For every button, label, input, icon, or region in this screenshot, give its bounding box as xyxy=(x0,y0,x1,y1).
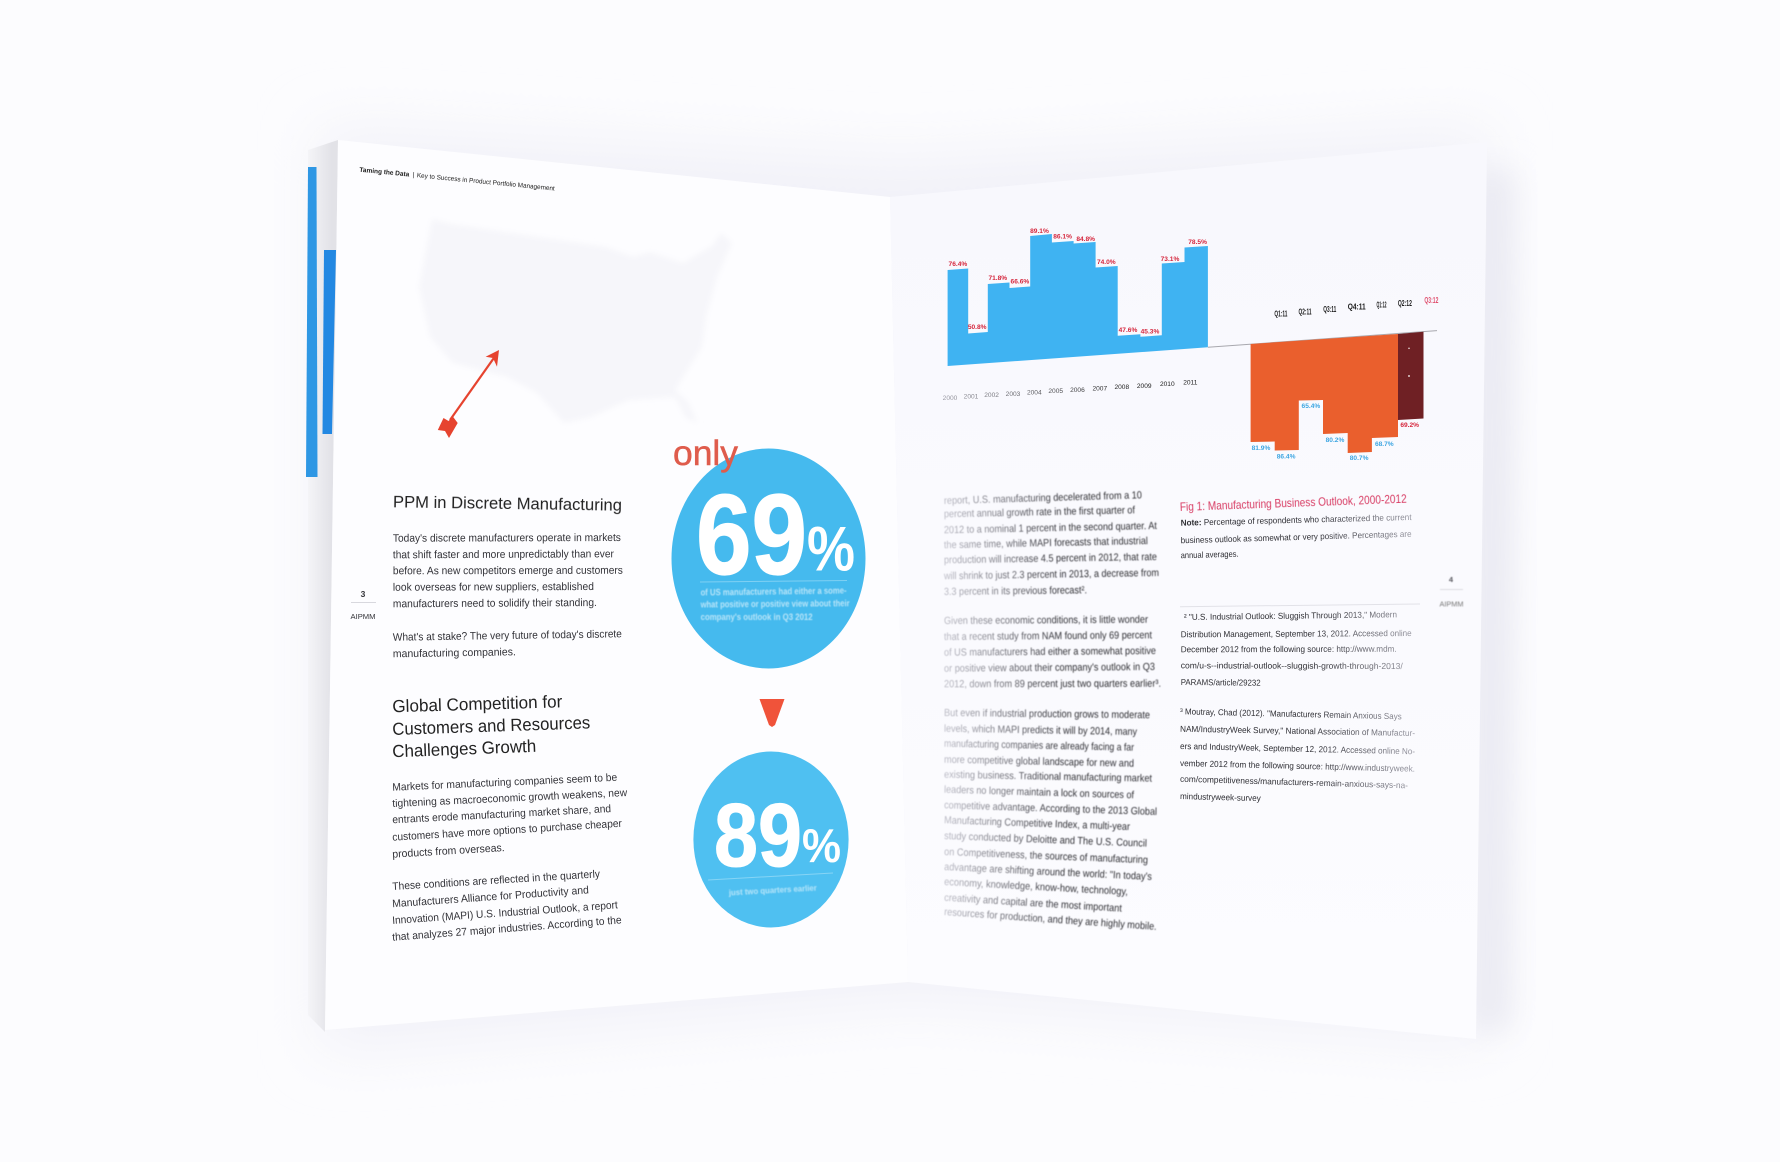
page number right: AIPMM xyxy=(1440,602,1464,608)
body text: intro xyxy=(393,532,623,660)
body text: intro: before. As new competitors emerge and customers xyxy=(393,565,623,577)
blue tab outer xyxy=(306,167,318,477)
quarter value labels: 86.4% xyxy=(1277,454,1296,460)
figure note xyxy=(1180,512,1412,560)
quarter labels: Q3:12 xyxy=(1424,296,1439,305)
page stack on the left edge xyxy=(306,140,338,1032)
body text: markets: Markets for manufacturing companies seem to be xyxy=(392,772,617,794)
running header: | xyxy=(412,172,415,179)
body text: right page column: 2012 to a nominal 1 percent in the second quarter. At xyxy=(944,521,1157,536)
figure title: Fig 1: Manufacturing Business Outlook, 2000-2012 xyxy=(1180,493,1407,514)
book shadow xyxy=(320,130,1490,1050)
quarter value labels: 69.2% xyxy=(1400,422,1419,429)
footnotes: Distribution Management, September 13, 2012. Accessed online xyxy=(1181,628,1412,639)
bar value labels: 84.8% xyxy=(1076,236,1095,243)
figure note: business outlook as somewhat or very positive. Percentages are xyxy=(1180,529,1412,545)
footnotes: ³ Moutray, Chad (2012). "Manufacturers Remain Anxious Says xyxy=(1180,706,1402,721)
word: only: only xyxy=(673,434,738,473)
footnotes: ers and IndustryWeek, September 12, 2012. Accessed online No- xyxy=(1180,741,1415,756)
bar value labels: 66.6% xyxy=(1011,278,1029,286)
map of the United States xyxy=(419,219,732,423)
body text: right page column: of US manufacturers had either a somewhat positive xyxy=(944,646,1156,659)
year axis labels: 2001 xyxy=(964,394,979,400)
body text: right page column: competitive advantage. According to the 2013 Global xyxy=(944,800,1157,818)
body text: markets: tightening as macroeconomic growth weakens, new xyxy=(392,787,628,810)
bar value labels: 71.8% xyxy=(988,275,1007,282)
body text: right page column: study conducted by Deloitte and The U.S. Council xyxy=(944,831,1147,850)
body text: right page column: manufacturing companies are already facing a far xyxy=(944,739,1135,754)
down triangle xyxy=(760,699,784,727)
panel: left page xyxy=(325,140,908,1030)
body text: markets: These conditions are reflected in the quarterly xyxy=(392,868,601,893)
body text: intro: manufacturing companies. xyxy=(393,646,516,660)
caption xyxy=(700,585,850,622)
body text: markets: Innovation (MAPI) U.S. Industrial Outlook, a report xyxy=(392,899,618,927)
year axis labels: 2004 xyxy=(1027,390,1042,396)
body text: right page column: But even if industrial production grows to moderate xyxy=(944,708,1150,721)
current quarter bar xyxy=(1398,332,1424,420)
year axis labels: 2003 xyxy=(1006,391,1021,398)
bar value labels: 73.1% xyxy=(1161,256,1179,263)
quarter labels: Q2:11 xyxy=(1298,308,1312,317)
caption: just two quarters earlier xyxy=(728,883,818,898)
quarter value labels xyxy=(1252,403,1419,462)
figure note: Note: Percentage of respondents who characterized the current xyxy=(1181,512,1412,528)
bar value labels: 74.0% xyxy=(1097,259,1116,266)
year axis labels: 2011 xyxy=(1183,380,1198,386)
running header xyxy=(359,167,555,193)
caption: of US manufacturers had either a some- xyxy=(700,585,847,597)
page number right: 4 xyxy=(1449,575,1454,584)
year axis labels: 2009 xyxy=(1137,383,1152,390)
quarter labels: Q3:11 xyxy=(1323,305,1337,314)
footnotes: mindustryweek-survey xyxy=(1180,791,1262,803)
bar value labels: 45.3% xyxy=(1141,328,1159,336)
body text: right page column: 2012, down from 89 percent just two quarters earlier³. xyxy=(944,679,1161,690)
heading: Global Competition: Customers and Resources xyxy=(392,712,591,739)
chart: annual outlook bars xyxy=(943,228,1208,402)
body text: right page column: leaders no longer maintain a lock on sources of xyxy=(944,785,1134,801)
bar value labels: 76.4% xyxy=(949,261,967,268)
bar value labels: 47.6% xyxy=(1119,327,1137,334)
body text: right page column: report, U.S. manufacturing decelerated from a 10 xyxy=(944,490,1142,507)
body text: markets: customers have more options to purchase cheaper xyxy=(392,818,623,844)
body text: right page column: levels, which MAPI predicts it will by 2014, many xyxy=(944,724,1138,738)
body text: intro: What's at stake? The very future of today's discrete xyxy=(393,628,622,644)
body text: right page column: or positive view about their company's outlook in Q3 xyxy=(944,662,1155,675)
quarter labels: Q4:11 xyxy=(1348,303,1366,312)
quarter labels: Q2:12 xyxy=(1398,299,1412,308)
body text: markets: products from overseas. xyxy=(392,842,505,861)
body text: right page column: economy, knowledge, know-how, technology, xyxy=(944,877,1128,898)
quarter labels: Q1:12 xyxy=(1376,301,1387,310)
bar value labels: 50.8% xyxy=(968,324,987,331)
body text: intro: look overseas for new suppliers, established xyxy=(393,581,594,594)
body text: right page column: Given these economic conditions, it is little wonder xyxy=(944,615,1148,627)
page number left xyxy=(350,589,376,621)
quarter value labels: 80.7% xyxy=(1350,455,1369,462)
body text: right page column: that a recent study from NAM found only 69 percent xyxy=(944,630,1152,643)
footnotes: ² "U.S. Industrial Outlook: Sluggish Through 2013," Modern xyxy=(1184,609,1397,622)
year axis labels xyxy=(943,380,1198,402)
bar value labels: 86.1% xyxy=(1053,234,1072,240)
figure 89: 89 xyxy=(714,786,802,886)
caption: company's outlook in Q3 2012 xyxy=(701,612,813,622)
body text: intro: manufacturers need to solidify their standing. xyxy=(393,597,597,610)
footnotes: com/competitiveness/manufacturers-remain-anxious-says-na- xyxy=(1180,774,1408,790)
year axis labels: 2010 xyxy=(1160,381,1175,388)
heading: Global Competition: Global Competition for xyxy=(392,691,563,716)
red arrow xyxy=(438,350,499,438)
bar value labels xyxy=(949,228,1207,336)
year axis labels: 2006 xyxy=(1070,387,1085,394)
footnotes: com/u-s--industrial-outlook--sluggish-growth-through-2013/ xyxy=(1181,660,1403,671)
quarter value labels: 68.7% xyxy=(1375,441,1394,448)
body text: right page column: the same time, while MAPI forecasts that industrial xyxy=(944,536,1148,551)
blue tab inner xyxy=(322,250,336,434)
bar value labels: 89.1% xyxy=(1030,228,1049,235)
body text: right page column: on Competitiveness, the sources of manufacturing xyxy=(944,847,1148,866)
panel: right page xyxy=(890,142,1487,1039)
quarter value labels: 81.9% xyxy=(1252,445,1270,452)
body text: right page column: percent annual growth rate in the first quarter of xyxy=(944,505,1135,520)
body text: markets: entrants erode manufacturing market share, and xyxy=(392,803,611,826)
body text: right page column: production will increase 4.5 percent in 2012, that rate xyxy=(944,552,1157,566)
percent sign: % xyxy=(807,514,855,584)
footnotes: December 2012 from the following source: http://www.mdm. xyxy=(1181,644,1397,654)
page number right xyxy=(1440,575,1464,608)
body text: right page column: advantage are shifting around the world: "In today's xyxy=(944,862,1152,883)
body text: markets: that analyzes 27 major industries. According to the xyxy=(392,914,622,944)
caption: what positive or positive view about their xyxy=(700,598,850,610)
page number left: AIPMM xyxy=(350,612,376,621)
heading: Global Competition xyxy=(392,691,591,761)
body text: right page column: will shrink to just 2.3 percent in 2013, a decrease from xyxy=(943,568,1159,582)
footnotes: PARAMS/article/29232 xyxy=(1181,677,1261,688)
body text: markets: Manufacturers Alliance for Productivity and xyxy=(392,884,589,910)
quarter labels xyxy=(1274,296,1439,318)
body text: markets xyxy=(392,772,628,944)
chart: quarterly outlook bars xyxy=(1251,296,1439,462)
stat circle: 69% xyxy=(672,448,866,668)
quarter value labels: 80.2% xyxy=(1326,437,1344,444)
footnotes: NAM/IndustryWeek Survey," National Association of Manufactur- xyxy=(1180,724,1415,738)
stat circle: 89% xyxy=(693,752,849,928)
footnotes xyxy=(1180,609,1415,803)
year axis labels: 2008 xyxy=(1114,384,1129,391)
quarter labels: Q1:11 xyxy=(1274,309,1288,318)
body text: intro: Today's discrete manufacturers operate in markets xyxy=(393,532,621,545)
percent sign: % xyxy=(802,819,841,872)
body text: right page column: Manufacturing Competitive Index, a multi-year xyxy=(944,815,1131,833)
body text: right page column: more competitive global landscape for new and xyxy=(944,755,1134,770)
page number left: 3 xyxy=(361,589,366,599)
body text: right page column: existing business. Traditional manufacturing market xyxy=(944,770,1152,785)
body text: right page column: 3.3 percent in its previous forecast². xyxy=(944,585,1087,598)
figure 69: 69 xyxy=(696,472,807,599)
body text: right page column: resources for production, and they are highly mobile. xyxy=(944,907,1157,933)
right edge shadow xyxy=(1470,170,1515,1030)
year axis labels: 2007 xyxy=(1092,386,1107,392)
year axis labels: 2002 xyxy=(984,392,999,399)
body text: intro: that shift faster and more unpredictably than ever xyxy=(393,548,614,561)
year axis labels: 2000 xyxy=(943,395,958,402)
body text: right page column: creativity and capital are the most important xyxy=(944,893,1122,915)
quarter value labels: 65.4% xyxy=(1302,403,1320,410)
running header: Taming the Data xyxy=(359,167,410,179)
heading: PPM in Discrete Manufacturing: PPM in Discrete Manufacturing xyxy=(393,493,622,515)
heading: Global Competition: Challenges Growth xyxy=(392,736,537,761)
chart axis line xyxy=(1208,331,1437,347)
footnotes: vember 2012 from the following source: http://www.industryweek. xyxy=(1180,758,1415,774)
bar value labels: 78.5% xyxy=(1188,239,1207,246)
body text: right page column xyxy=(943,490,1161,933)
figure note: annual averages. xyxy=(1180,549,1239,560)
running header: Key to Success in Product Portfolio Management xyxy=(417,172,555,193)
year axis labels: 2005 xyxy=(1048,388,1063,395)
